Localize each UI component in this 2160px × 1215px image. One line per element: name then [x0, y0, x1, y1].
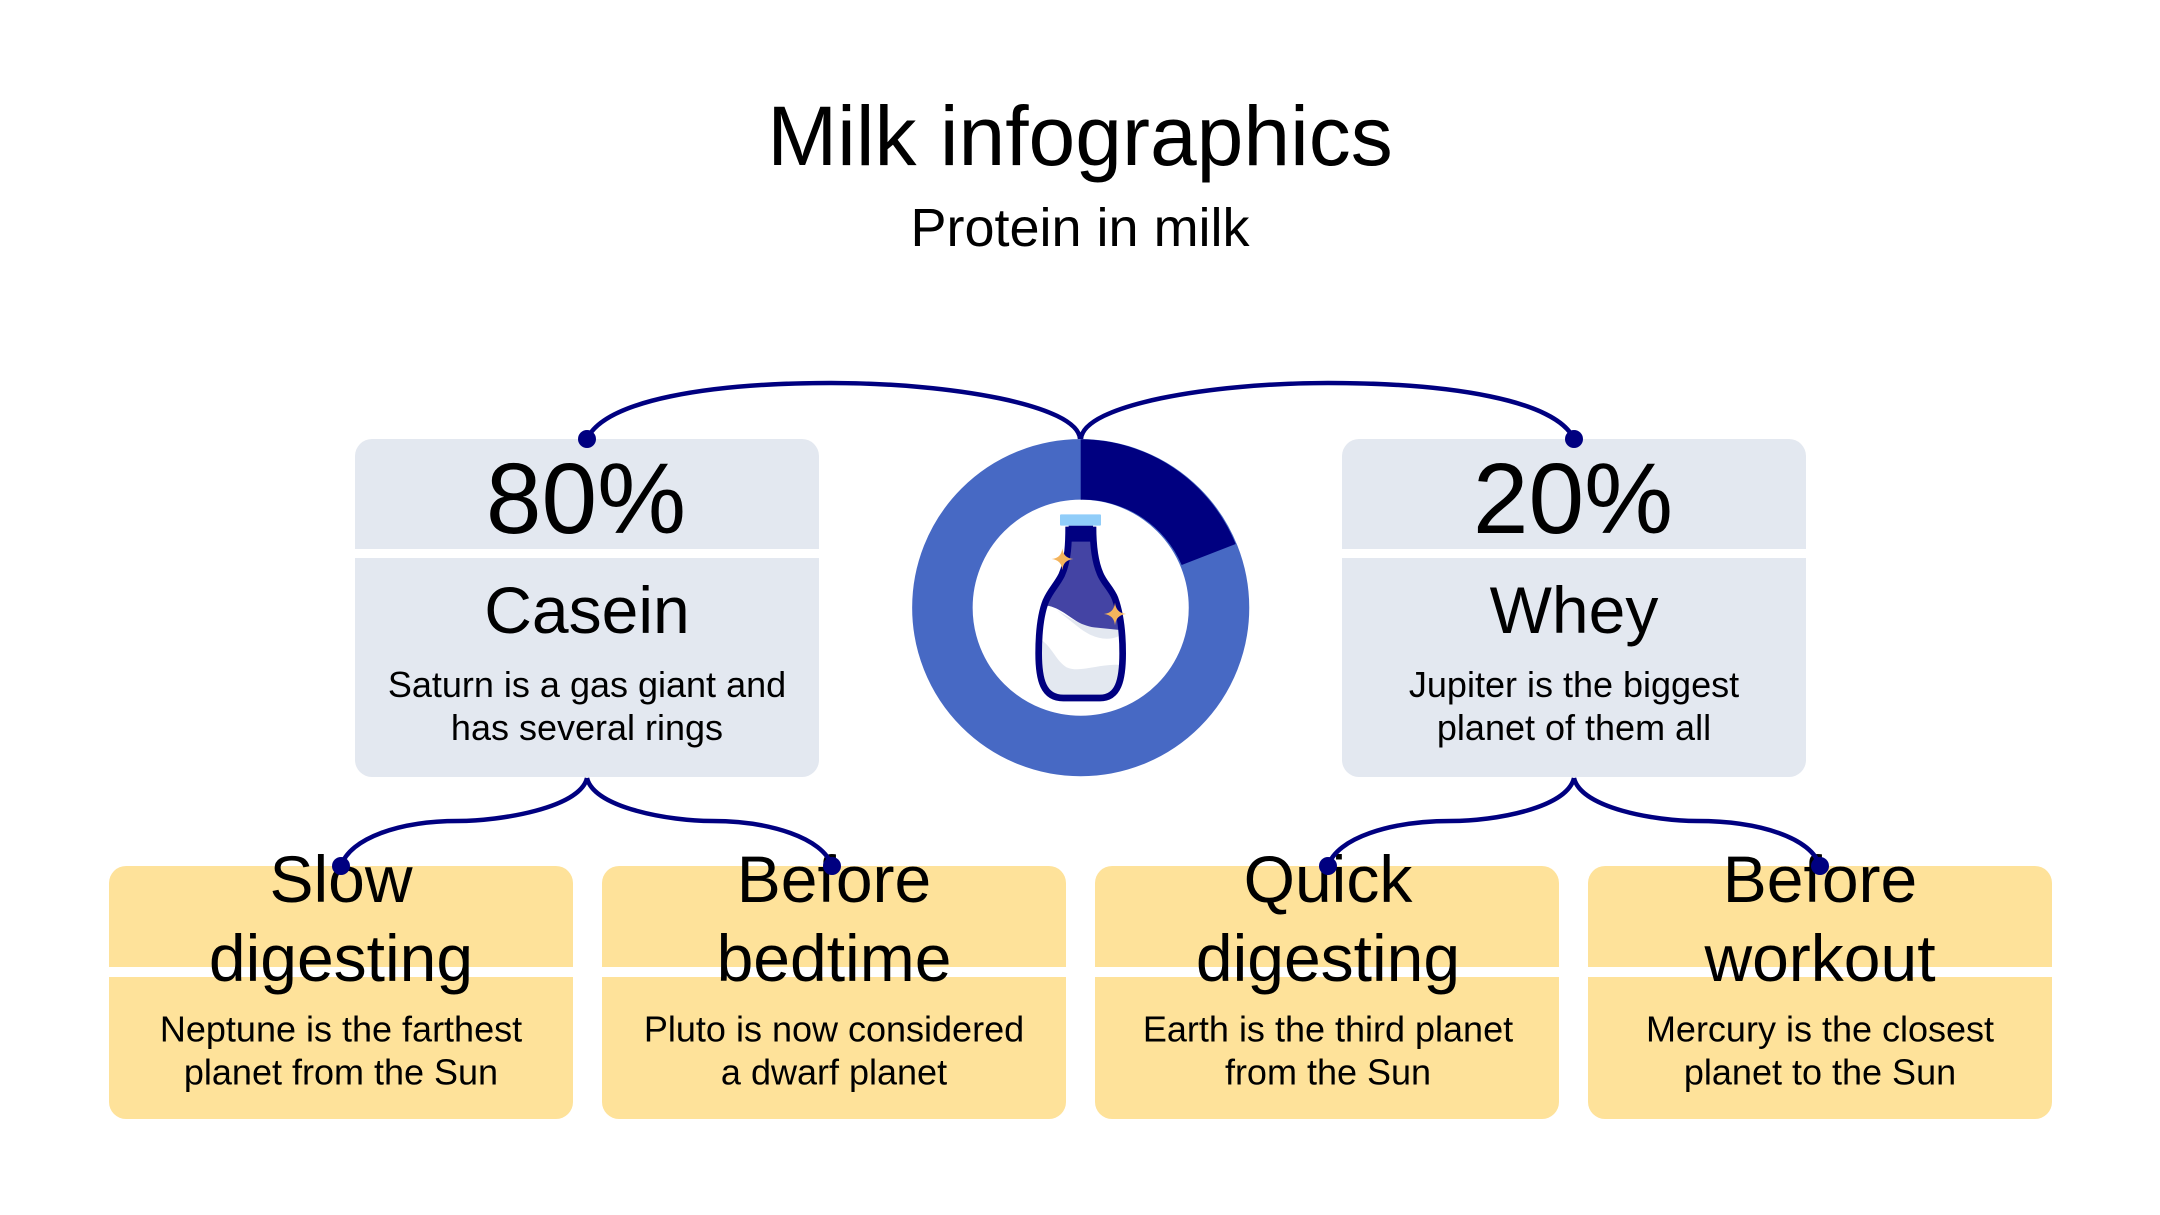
panel: slow digesting: Slow	[269, 842, 413, 916]
panel: before bedtime: bedtime	[717, 921, 951, 995]
panel: before bedtime: a dwarf planet	[721, 1052, 947, 1092]
icon: milk bottle	[1039, 514, 1126, 698]
panel: before workout	[1588, 842, 2052, 1119]
whey description block	[1342, 558, 1806, 777]
connector: whey to quick digesting	[1319, 778, 1574, 875]
panel: quick digesting: digesting	[1196, 921, 1460, 995]
panel: slow digesting: digesting	[209, 921, 473, 995]
subtitle: Protein in milk	[910, 198, 1251, 258]
panel: before bedtime: Before	[737, 842, 931, 916]
donut chart	[942, 439, 1236, 746]
connector: donut to casein	[578, 383, 1080, 448]
title: Milk infographics	[767, 89, 1393, 183]
connector: whey to before workout	[1574, 778, 1829, 875]
panel: before bedtime	[602, 842, 1066, 1119]
casein description block: has several rings	[451, 707, 723, 748]
percentage block	[1342, 439, 1806, 555]
panel: before bedtime: Pluto is now considered	[644, 1008, 1024, 1050]
percentage block: 20%	[1473, 443, 1673, 555]
percentage block	[355, 439, 819, 555]
panel: whey	[1342, 439, 1806, 777]
casein description block	[355, 558, 819, 777]
connector: donut to whey	[1081, 383, 1583, 448]
panel: slow digesting: Neptune is the farthest	[160, 1008, 522, 1050]
panel: casein	[355, 439, 819, 777]
connector: casein to slow digesting	[332, 778, 587, 875]
panel: quick digesting: Quick	[1244, 842, 1413, 916]
percentage block: 80%	[486, 443, 686, 555]
panel: quick digesting: Earth is the third planet	[1143, 1008, 1513, 1050]
panel: quick digesting	[1095, 842, 1559, 1119]
casein description block: Casein	[484, 573, 690, 647]
whey description block: Whey	[1490, 573, 1658, 647]
panel: quick digesting: from the Sun	[1225, 1052, 1431, 1092]
panel: before workout: Before	[1723, 842, 1917, 916]
panel: before workout: planet to the Sun	[1684, 1052, 1956, 1092]
panel: before workout: Mercury is the closest	[1646, 1008, 1994, 1050]
whey description block: Jupiter is the biggest	[1409, 664, 1739, 705]
panel: before workout: workout	[1703, 921, 1936, 995]
panel: slow digesting	[109, 842, 573, 1119]
connector: casein to before bedtime	[587, 778, 841, 875]
panel: slow digesting: planet from the Sun	[184, 1052, 498, 1092]
casein description block: Saturn is a gas giant and	[388, 664, 786, 705]
whey description block: planet of them all	[1437, 707, 1711, 748]
